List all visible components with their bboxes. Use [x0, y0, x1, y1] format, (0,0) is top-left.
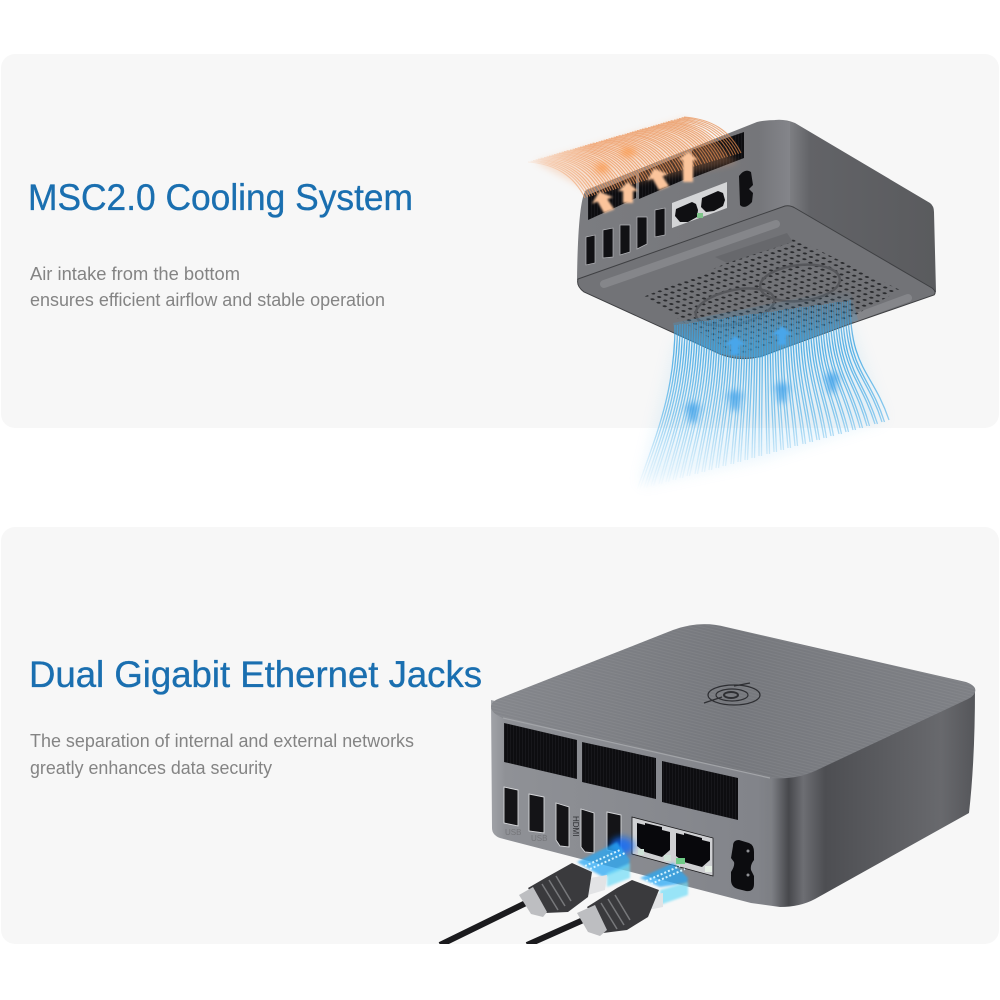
rear vents — [504, 723, 738, 820]
text block: ethernet description — [30, 731, 414, 778]
device bottom plate — [578, 206, 935, 359]
orange glows — [595, 147, 636, 173]
ventilation perforations — [643, 237, 900, 357]
mini PC: underside view — [577, 120, 936, 359]
text block: ethernet description: greatly enhances data security — [30, 758, 272, 778]
intake streamlines — [637, 300, 889, 490]
logo on lid — [704, 683, 760, 705]
power socket — [731, 840, 754, 891]
lid edge highlight — [503, 718, 770, 778]
status lights — [697, 213, 703, 218]
mini PC: rear view — [440, 624, 975, 945]
device front and side faces — [491, 688, 975, 907]
plug one — [588, 875, 607, 895]
label plate — [715, 233, 793, 263]
socket pins — [746, 850, 750, 876]
ethernet sockets — [675, 191, 725, 222]
fan rings — [692, 261, 842, 332]
power socket — [739, 171, 753, 207]
blue arrows — [683, 371, 842, 422]
port labels — [505, 816, 580, 843]
orange arrows — [589, 152, 698, 216]
text block: ethernet description: The separation of internal and external networks — [30, 731, 414, 751]
intake soft glow — [640, 320, 885, 485]
device top surface — [491, 624, 975, 778]
device rear face — [577, 120, 790, 282]
airflow: hot exhaust — [528, 117, 741, 216]
text block: cooling description — [30, 264, 385, 310]
intake wash — [673, 288, 858, 358]
text block: cooling description: ensures efficient airflow and stable operation — [30, 290, 385, 310]
exhaust streamlines — [528, 117, 741, 198]
network glow — [577, 837, 688, 905]
rear vents — [588, 132, 744, 220]
rear ports — [586, 208, 665, 265]
device side face — [775, 120, 936, 322]
ethernet plate — [632, 817, 713, 876]
panel: cooling system background — [1, 54, 999, 428]
ethernet cables and plugs — [440, 863, 663, 945]
panel: ethernet background — [1, 527, 999, 944]
blue arrows on plate — [725, 326, 792, 355]
port labels: HDMI — [571, 816, 580, 836]
port labels: USB — [505, 828, 521, 837]
text block: cooling description: Air intake from the bottom — [30, 264, 240, 284]
port labels: USB — [531, 834, 547, 843]
status lights — [638, 849, 712, 872]
exhaust streamlines, interleaved — [531, 118, 739, 197]
heading: cooling system: MSC2.0 Cooling System — [28, 177, 413, 218]
plug two — [651, 893, 663, 910]
lid texture — [491, 624, 975, 778]
intake streamlines, interleaved — [640, 301, 884, 490]
heading: ethernet: Dual Gigabit Ethernet Jacks — [29, 654, 482, 695]
plate rails — [604, 224, 908, 318]
USB and HDMI ports — [504, 787, 621, 853]
ethernet sockets — [637, 823, 710, 867]
contact pins — [585, 850, 685, 884]
exhaust wash — [535, 118, 738, 192]
airflow: cool intake — [637, 288, 889, 490]
ethernet plate — [672, 182, 727, 228]
